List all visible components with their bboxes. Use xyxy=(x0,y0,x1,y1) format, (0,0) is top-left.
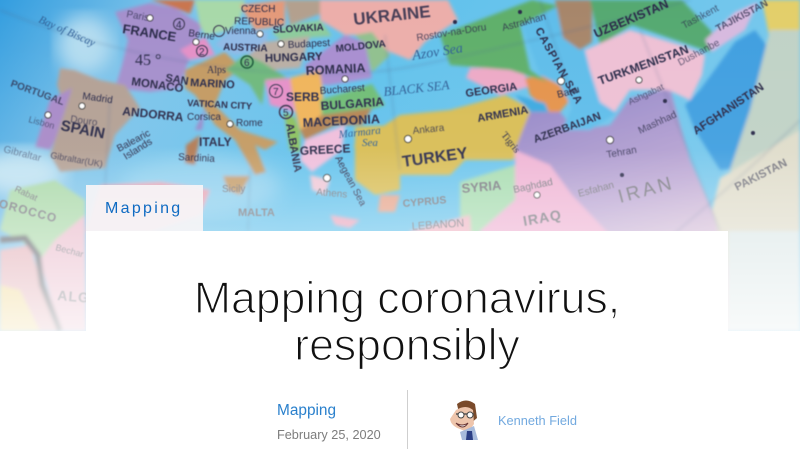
map labels: ROMANIA xyxy=(305,61,366,78)
map labels: Sea xyxy=(362,137,378,149)
title: Mapping coronavirus, xyxy=(194,274,620,323)
map labels: Mashhad xyxy=(637,109,679,137)
title xyxy=(194,274,620,370)
map labels: HUNGARY xyxy=(265,51,323,65)
graticule lines xyxy=(0,0,800,331)
map labels: BULGARIA xyxy=(320,95,385,113)
map labels: Tigris xyxy=(499,130,522,155)
map labels: Ankara xyxy=(412,123,445,137)
map labels: MACEDONIA xyxy=(302,112,380,130)
map labels: Paris xyxy=(125,9,150,24)
map labels: Baku xyxy=(556,84,581,101)
map labels: Alps xyxy=(207,65,226,76)
map labels: ITALY xyxy=(199,135,232,149)
article card xyxy=(86,231,728,331)
map labels: LEBANON xyxy=(411,217,465,233)
map labels: Esfahan xyxy=(577,180,615,200)
countries xyxy=(0,0,800,331)
map labels: ALG xyxy=(57,287,91,306)
map labels: MALTA xyxy=(238,207,275,219)
map labels: SLOVAKIA xyxy=(273,22,324,36)
map labels: 45 ° xyxy=(135,52,161,69)
map labels: IRAN xyxy=(616,173,677,208)
map labels: Ashgabat xyxy=(627,81,666,107)
map labels: Berne xyxy=(188,28,216,43)
sea background xyxy=(0,0,800,331)
map labels: Gibraltar xyxy=(2,144,43,164)
map labels: TURKEY xyxy=(401,145,469,171)
map labels: Bay of Biscay xyxy=(37,14,97,49)
hero: globe map photograph xyxy=(0,0,800,331)
map labels: Rostov-na-Doru xyxy=(416,22,487,44)
map labels: 2 xyxy=(199,47,205,58)
divider xyxy=(407,390,408,449)
map labels: 5 xyxy=(283,108,289,119)
map labels: SAN xyxy=(164,72,189,88)
map labels: Bechar xyxy=(54,242,85,259)
map labels: VATICAN CITY xyxy=(187,98,253,112)
publication date: February 25, 2020 xyxy=(277,428,381,442)
map labels: Rome xyxy=(236,118,263,129)
map labels: TURKMENISTAN xyxy=(596,42,690,88)
map labels: 7 xyxy=(273,87,279,98)
map labels: Budapest xyxy=(288,38,331,51)
map labels: MARINO xyxy=(190,77,235,91)
map labels: REPUBLIC xyxy=(234,16,284,29)
map labels: Marmara xyxy=(337,125,382,141)
photo fade xyxy=(0,0,800,331)
map labels: Rabat xyxy=(13,184,40,203)
category tag: Mapping xyxy=(105,200,182,217)
map labels: Bucharest xyxy=(319,83,365,97)
map labels xyxy=(0,0,789,306)
map labels: GREECE xyxy=(299,141,351,158)
map labels: AFGHANISTAN xyxy=(691,81,766,137)
map labels: ANDORRA xyxy=(122,104,184,124)
map labels: Tehran xyxy=(606,145,638,161)
map labels: Gibraltar(UK) xyxy=(50,150,104,169)
map labels: CASPIAN SEA xyxy=(532,26,585,107)
map labels: GEORGIA xyxy=(465,81,518,100)
map labels: AUSTRIA xyxy=(223,42,268,55)
map labels: Aegean Sea xyxy=(332,154,368,208)
map labels: UKRAINE xyxy=(352,2,431,29)
map labels: 4 xyxy=(176,20,182,31)
map labels: SPAIN xyxy=(59,117,106,142)
map labels: Balearic xyxy=(115,128,152,155)
map labels: Lisbon xyxy=(27,114,56,131)
map labels: PAKISTAN xyxy=(733,157,789,194)
map labels: AZERBAIJAN xyxy=(532,110,603,146)
map labels: Madrid xyxy=(82,91,113,106)
map labels: Athens xyxy=(316,187,348,201)
map labels: SERB xyxy=(286,90,320,104)
map labels: 6 xyxy=(244,58,250,69)
map labels: Vienna xyxy=(225,26,256,37)
map labels: FRANCE xyxy=(122,21,178,44)
map labels: IRAQ xyxy=(522,206,563,229)
map labels: SYRIA xyxy=(461,178,502,196)
map labels: Baghdad xyxy=(512,177,554,196)
category tag xyxy=(86,185,203,231)
map labels: Tashkent xyxy=(680,3,721,32)
map labels: MOLDOVA xyxy=(335,39,386,55)
category link: Mapping xyxy=(277,402,336,419)
map labels: Douro xyxy=(70,114,99,129)
map labels: Dushanbe xyxy=(676,37,722,69)
map labels: CZECH xyxy=(241,4,275,15)
map labels: CYPRUS xyxy=(402,194,447,210)
map labels: MONACO xyxy=(131,76,184,95)
map labels: PORTUGAL xyxy=(9,78,65,108)
map labels: Astrakhan xyxy=(501,12,547,34)
map labels: BLACK SEA xyxy=(383,77,450,99)
map labels: Sardinia xyxy=(178,152,215,165)
map labels: Sicily xyxy=(222,184,245,195)
map labels: Corsica xyxy=(187,112,221,123)
map labels: ARMENIA xyxy=(476,104,529,125)
map labels: Azov Sea xyxy=(410,41,464,64)
author name: Kenneth Field xyxy=(498,413,577,428)
title: responsibly xyxy=(294,321,520,370)
map labels: ALBANIA xyxy=(283,122,303,173)
icon: author caricature avatar xyxy=(450,400,478,440)
map labels: Islands xyxy=(122,136,154,163)
